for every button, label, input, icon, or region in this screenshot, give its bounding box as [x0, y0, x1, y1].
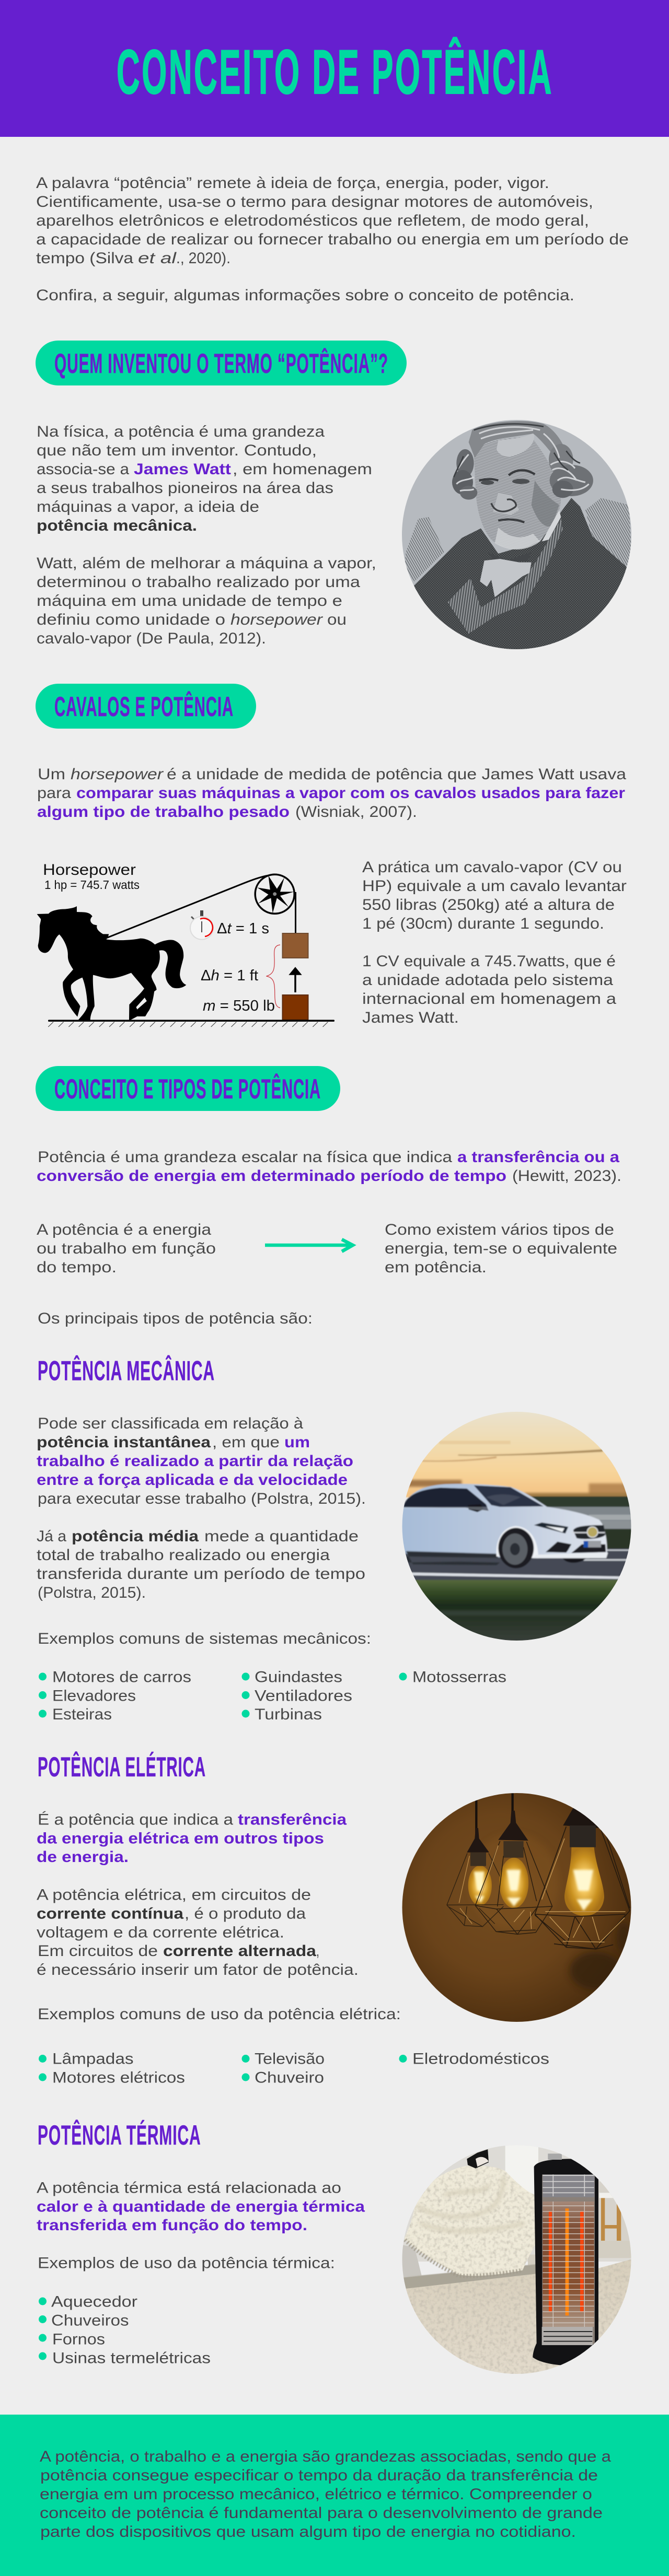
text block: , em que — [212, 1434, 280, 1451]
text block: , é o produto da — [184, 1905, 306, 1922]
text block: cavalo-vapor — [362, 859, 627, 1026]
text block: trabalho é realizado a partir da relação — [37, 1453, 353, 1470]
image: car — [399, 1410, 636, 1643]
text block: James Watt: máquina em uma unidade de tempo e — [37, 592, 342, 610]
text block: da energia elétrica em outros tipos — [37, 1830, 324, 1847]
text block: (Polstra, 2015). — [38, 1584, 146, 1601]
text block: corrente contínua — [37, 1905, 183, 1922]
text block: horsepower: (Wisniak, 2007). — [295, 803, 417, 821]
conclusion text — [40, 2448, 611, 2540]
text block: para executar esse trabalho (Polstra, 2015). — [38, 1490, 366, 1507]
text block: James Watt: cavalo-vapor (De Paula, 2012). — [37, 630, 266, 647]
text block: cavalo-vapor: 550 libras (250kg) até a altura de — [362, 896, 615, 914]
text block: cavalo-vapor: HP) equivale a um cavalo levantar — [362, 877, 627, 895]
text block: James Watt: a seus trabalhos pioneiros na área das — [37, 479, 333, 497]
horsepower diagram — [37, 861, 334, 1027]
text: examples intro: Exemplos comuns de uso da potência elétrica: — [38, 2006, 401, 2023]
intro text block: Confira, a seguir, algumas informações sobre o conceito de potência. — [36, 287, 574, 304]
text block: left of arrow: ou trabalho em função — [37, 1240, 216, 1257]
list: electrical examples: Televisão — [255, 2051, 325, 2067]
text block: James Watt: Na física, a potência é uma grandeza — [37, 423, 325, 440]
intro text block: et al — [138, 250, 177, 267]
text block: definition: Potência é uma grandeza escalar na física que indica — [38, 1149, 452, 1166]
list: electrical examples — [39, 2051, 549, 2086]
text block: James Watt: máquinas a vapor, a ideia de — [37, 498, 259, 516]
text block: right of arrow — [385, 1221, 617, 1276]
list: mechanical examples: Ventiladores — [255, 1687, 352, 1705]
list: thermal examples: Aquecedor — [51, 2293, 137, 2311]
text block: um — [284, 1434, 310, 1451]
header band — [0, 0, 669, 137]
lower box — [282, 995, 308, 1020]
text block: James Watt: associa-se a — [37, 461, 129, 478]
text block: calor e à quantidade de energia térmica — [37, 2198, 365, 2216]
conclusion text: conceito de potência é fundamental para o desenvolvimento de grande — [40, 2504, 603, 2522]
text block: potência instantânea — [37, 1434, 211, 1451]
panel: cavalos e potência — [36, 684, 627, 1027]
text block: horsepower: horsepower — [71, 766, 164, 783]
text block: James Watt: ou — [327, 611, 347, 628]
conclusion text: potência consegue especificar o tempo da duração da transferência de — [40, 2467, 598, 2484]
hair — [452, 421, 593, 500]
text block: definition: a transferência ou a — [457, 1149, 619, 1166]
text block: mede a quantidade — [204, 1528, 359, 1545]
panel: quem inventou — [36, 341, 634, 651]
intro text block — [36, 174, 629, 304]
text: types intro: Os principais tipos de potência são: — [38, 1310, 313, 1327]
diagram subtitle: 1 hp = 745.7 watts — [44, 878, 140, 892]
list: electrical examples: Lâmpadas — [52, 2051, 134, 2067]
conclusion text: parte dos dispositivos que usam algum tipo de energia no cotidiano. — [40, 2523, 576, 2540]
text block: definition: (Hewitt, 2023). — [512, 1167, 621, 1185]
text block: right of arrow: energia, tem-se o equivalente — [385, 1240, 617, 1257]
text block — [37, 1415, 366, 1601]
face features — [479, 470, 535, 522]
text block: horsepower: para — [37, 784, 71, 802]
list: electrical examples: Eletrodomésticos — [412, 2051, 549, 2067]
text block: horsepower: é a unidade de medida de potência que James Watt usava — [167, 766, 626, 783]
text block: de energia. — [37, 1848, 129, 1866]
text block: horsepower: comparar suas máquinas a vapor com os cavalos usados para fazer — [76, 784, 625, 802]
list: mechanical examples: Turbinas — [255, 1706, 322, 1723]
text block: corrente alternada — [163, 1942, 316, 1960]
section pill heading: CAVALOS E POTÊNCIA — [54, 690, 234, 722]
text block: horsepower: Um — [38, 766, 65, 783]
red brace — [266, 945, 280, 1008]
text block: right of arrow: Como existem vários tipos de — [385, 1221, 614, 1238]
list: mechanical examples — [39, 1668, 506, 1723]
list: mechanical examples: Elevadores — [52, 1687, 136, 1705]
text block: total de trabalho realizado ou energia — [37, 1547, 330, 1564]
text block: Já a — [37, 1528, 66, 1545]
intro text block: a capacidade de realizar ou fornecer trabalho ou energia em um período de — [36, 231, 629, 248]
image: heater — [399, 2143, 636, 2380]
image: pendant lamps — [399, 1792, 634, 2025]
heading: POTÊNCIA TÉRMICA — [38, 2119, 201, 2151]
heater body — [533, 2153, 598, 2366]
text block: Pode ser classificada em relação à — [38, 1415, 303, 1432]
lamp 2 — [475, 1793, 552, 1934]
text block: A potência térmica está relacionada ao — [37, 2179, 341, 2197]
section pill heading — [36, 684, 256, 729]
text block: cavalo-vapor: internacional em homenagem a — [362, 990, 616, 1008]
text block: cavalo-vapor: 1 CV equivale a 745.7watts, que é — [362, 953, 616, 970]
text block: horsepower — [37, 766, 626, 821]
text block: definition — [37, 1149, 621, 1185]
lamp 3 — [535, 1808, 630, 1949]
list: mechanical examples: Guindastes — [255, 1668, 342, 1686]
text block: potência média — [72, 1528, 199, 1545]
text block: James Watt: potência mecânica. — [37, 517, 197, 534]
footer band — [0, 2415, 669, 2576]
panel: conceito e tipos — [36, 1066, 621, 1327]
text block: James Watt: que não tem um inventor. Contudo, — [37, 442, 317, 459]
text block: horsepower: algum tipo de trabalho pesado — [37, 803, 290, 821]
conclusion text: energia em um processo mecânico, elétrico e térmico. Compreender o — [40, 2486, 592, 2503]
panel: potência térmica — [37, 2119, 636, 2380]
text block: cavalo-vapor: A prática um cavalo-vapor (CV ou — [362, 859, 622, 876]
text block: left of arrow — [37, 1221, 216, 1276]
section pill heading: QUEM INVENTOU O TERMO “POTÊNCIA”? — [54, 347, 388, 379]
text block: left of arrow: A potência é a energia — [37, 1221, 211, 1238]
text block: Em circuitos de — [38, 1942, 158, 1960]
text block: entre a força aplicada e da velocidade — [37, 1471, 348, 1489]
panel: potência elétrica — [37, 1751, 634, 2086]
label: delta t: Δt = 1 s — [217, 920, 269, 937]
list: thermal examples: Chuveiros — [51, 2312, 129, 2329]
intro text block: tempo (Silva — [36, 250, 133, 267]
panel: potência mecânica — [37, 1355, 636, 1723]
list: electrical examples: Chuveiro — [255, 2069, 324, 2086]
text block: James Watt: determinou o trabalho realizado por uma — [37, 573, 360, 591]
lamp 1 — [447, 1800, 503, 1927]
text block: Exemplos de uso da potência térmica: — [38, 2254, 335, 2272]
list: mechanical examples: Motores de carros — [52, 1668, 191, 1686]
stopwatch — [190, 910, 213, 940]
text block: cavalo-vapor: James Watt. — [362, 1009, 459, 1026]
ground — [48, 1020, 334, 1027]
heading: POTÊNCIA MECÂNICA — [38, 1355, 215, 1386]
text block: É a potência que indica a — [38, 1811, 233, 1828]
text block: A potência elétrica, em circuitos de — [37, 1887, 311, 1903]
horse silhouette — [37, 906, 186, 1020]
list: thermal examples — [39, 2293, 211, 2367]
text block: James Watt: definiu como unidade o — [37, 611, 225, 628]
label: delta h: Δh = 1 ft — [201, 967, 258, 984]
text block: voltagem e da corrente elétrica. — [37, 1924, 284, 1941]
text block: cavalo-vapor: a unidade adotada pelo sistema — [362, 971, 613, 989]
image: portrait of James Watt — [401, 418, 634, 651]
intro text block: A palavra “potência” remete à ideia de força, energia, poder, vigor. — [36, 174, 549, 192]
text block: cavalo-vapor: 1 pé (30cm) durante 1 segundo. — [362, 915, 604, 932]
text block: right of arrow: em potência. — [385, 1259, 487, 1276]
arrow — [265, 1239, 353, 1251]
text block: James Watt: horsepower — [230, 611, 323, 628]
text block: transferida durante um período de tempo — [37, 1565, 365, 1583]
conclusion text: A potência, o trabalho e a energia são grandezas associadas, sendo que a — [40, 2448, 611, 2465]
section pill heading: CONCEITO E TIPOS DE POTÊNCIA — [54, 1073, 321, 1105]
upper box — [282, 933, 308, 958]
heading: POTÊNCIA ELÉTRICA — [38, 1751, 206, 1783]
rope and pulley — [106, 874, 296, 938]
text block: definition: conversão de energia em determinado período de tempo — [37, 1167, 506, 1185]
text block — [37, 2179, 365, 2272]
text block: James Watt: , em homenagem — [233, 461, 372, 478]
intro text block: aparelhos eletrônicos e eletrodomésticos que refletem, de modo geral, — [36, 212, 589, 229]
up arrow — [291, 968, 300, 992]
list: mechanical examples: Esteiras — [52, 1706, 112, 1723]
label: mass: m = 550 lb — [203, 998, 275, 1014]
text block: transferência — [238, 1811, 347, 1828]
text block: James Watt: James Watt — [134, 461, 231, 478]
list: thermal examples: Usinas termelétricas — [52, 2349, 211, 2367]
list: mechanical examples: Motosserras — [412, 1668, 506, 1686]
list: electrical examples: Motores elétricos — [52, 2069, 185, 2086]
text block: é necessário inserir um fator de potência. — [37, 1961, 359, 1978]
text block: , — [316, 1942, 319, 1960]
text: examples intro: Exemplos comuns de sistemas mecânicos: — [38, 1630, 371, 1647]
text block: transferida em função do tempo. — [37, 2217, 307, 2234]
diagram title: Horsepower — [43, 861, 136, 879]
list: thermal examples: Fornos — [52, 2331, 105, 2348]
section pill heading — [36, 1066, 340, 1111]
text block: James Watt: Watt, além de melhorar a máquina a vapor, — [37, 555, 376, 572]
intro text block: Cientificamente, usa-se o termo para designar motores de automóveis, — [36, 193, 593, 210]
section pill heading — [36, 341, 407, 385]
text block: James Watt — [37, 423, 376, 647]
text block — [37, 1811, 359, 1978]
text block: left of arrow: do tempo. — [37, 1259, 117, 1276]
intro text block: ., 2020). — [176, 250, 230, 267]
